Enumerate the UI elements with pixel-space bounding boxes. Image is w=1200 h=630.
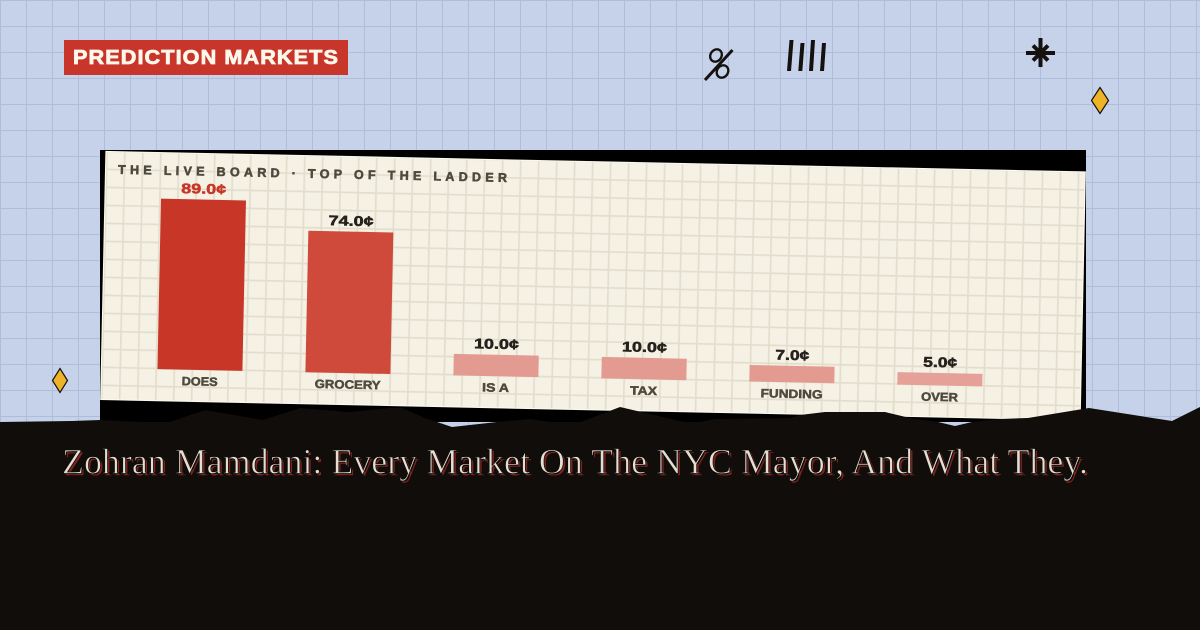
bar chart bbox=[157, 180, 986, 405]
icon: tally marks bbox=[787, 40, 826, 71]
bar: GROCERY 74.0: 74.0¢ bbox=[328, 212, 374, 229]
headline: Zohran Mamdani: Every Market On The NYC Mayor, And What They. bbox=[62, 442, 1088, 482]
bar: TAX 10.0 bbox=[601, 338, 687, 399]
icon: yellow diamond right bbox=[1092, 88, 1108, 114]
panel: the live board bbox=[101, 151, 1085, 420]
bar: DOES 89.0: 89.0¢ bbox=[181, 180, 227, 197]
bar: FUNDING 7.0: 7.0¢ bbox=[775, 347, 810, 363]
bar: OVER 5.0: 5.0¢ bbox=[923, 354, 958, 370]
badge: prediction markets: PREDICTION MARKETS bbox=[73, 47, 339, 69]
bar: GROCERY 74.0: GROCERY bbox=[315, 377, 381, 392]
bar: IS A 10.0: 10.0¢ bbox=[474, 335, 519, 352]
bar: GROCERY 74.0 bbox=[305, 212, 394, 393]
headline: Zohran Mamdani: Every Market On The NYC Mayor, And What They. bbox=[64, 444, 1090, 484]
badge: prediction markets bbox=[64, 40, 348, 75]
bar: DOES 89.0 bbox=[157, 180, 246, 389]
bar: FUNDING 7.0: FUNDING bbox=[760, 386, 823, 402]
bar: TAX 10.0: TAX bbox=[630, 384, 657, 398]
icon: yellow diamond left bbox=[52, 368, 68, 392]
bar: OVER 5.0: OVER bbox=[921, 390, 959, 404]
bar: DOES 89.0: DOES bbox=[182, 374, 218, 389]
bar: TAX 10.0: 10.0¢ bbox=[622, 338, 667, 355]
bar: IS A 10.0 bbox=[453, 335, 539, 396]
bar: FUNDING 7.0 bbox=[749, 346, 835, 402]
torn dark footer bbox=[0, 407, 1200, 630]
icon: percent sign bbox=[705, 47, 732, 80]
board backing shadow bbox=[100, 150, 1086, 422]
icon: asterisk bbox=[1026, 38, 1055, 67]
panel title: THE LIVE BOARD · TOP OF THE LADDER bbox=[118, 163, 507, 185]
bar: OVER 5.0 bbox=[897, 353, 983, 405]
bar: IS A 10.0: IS A bbox=[482, 380, 510, 395]
